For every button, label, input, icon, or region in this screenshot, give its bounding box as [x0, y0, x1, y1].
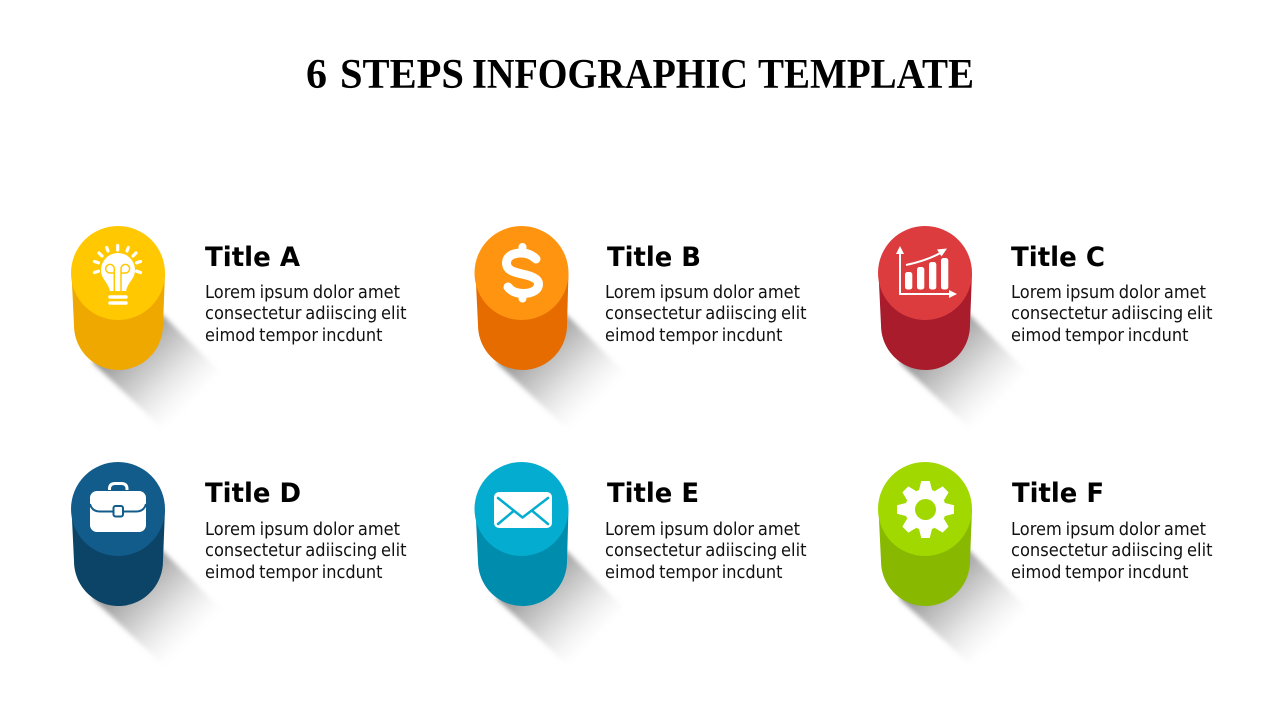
cylinder shadow D — [92, 550, 220, 666]
label C: Title C — [1011, 242, 1105, 273]
label E — [605, 478, 807, 583]
label B: Lorem ipsum dolor amet — [605, 283, 800, 303]
label F: consectetur adiiscing elit — [1011, 541, 1213, 561]
label A: eimod tempor incdunt — [205, 326, 383, 346]
cylinder shadow F — [899, 550, 1027, 666]
title: 6 — [306, 52, 327, 98]
label D: eimod tempor incdunt — [205, 563, 383, 583]
icon: bar chart — [896, 246, 957, 298]
title: STEPS — [340, 52, 464, 98]
label F: Lorem ipsum dolor amet — [1011, 520, 1206, 540]
cylinder top C — [878, 226, 972, 320]
label F: Title F — [1012, 478, 1104, 509]
label D: Title D — [205, 478, 301, 509]
label C — [1011, 242, 1213, 346]
panel: step D — [71, 462, 407, 666]
cylinder body E — [476, 509, 568, 606]
label B: Title B — [607, 242, 701, 273]
panel: step C — [878, 226, 1213, 430]
cylinder body D — [72, 509, 165, 606]
label C: eimod tempor incdunt — [1011, 326, 1189, 346]
label D: consectetur adiiscing elit — [205, 541, 407, 561]
label C: consectetur adiiscing elit — [1011, 304, 1213, 324]
icon: light bulb — [94, 246, 140, 303]
icon: briefcase — [90, 484, 146, 532]
cylinder body F — [878, 509, 972, 606]
cylinder shadow B — [496, 314, 624, 430]
cylinder top F — [878, 462, 972, 556]
cylinder body A — [72, 273, 165, 370]
panel: step E — [474, 462, 807, 666]
label E: consectetur adiiscing elit — [605, 541, 807, 561]
label E: Lorem ipsum dolor amet — [605, 520, 800, 540]
title: TEMPLATE — [758, 52, 974, 98]
label A: consectetur adiiscing elit — [205, 304, 407, 324]
cylinder body C — [878, 273, 972, 370]
label B — [605, 242, 807, 346]
label D — [205, 478, 407, 583]
panel: step A — [71, 226, 407, 430]
cylinder top E — [474, 462, 568, 556]
label F: eimod tempor incdunt — [1011, 563, 1189, 583]
icon: envelope — [494, 492, 552, 528]
panel: step F — [878, 462, 1213, 666]
label A: Lorem ipsum dolor amet — [205, 283, 400, 303]
label B: eimod tempor incdunt — [605, 326, 783, 346]
cylinder top D — [71, 462, 165, 556]
label A — [205, 242, 407, 346]
cylinder shadow E — [496, 550, 624, 666]
label D: Lorem ipsum dolor amet — [205, 520, 400, 540]
cylinder top B — [474, 226, 568, 320]
cylinder body B — [476, 273, 568, 370]
label F — [1011, 478, 1213, 583]
label E: Title E — [607, 478, 699, 509]
panel: step B — [474, 226, 807, 430]
icon: gear — [897, 481, 954, 538]
icon: dollar sign — [506, 247, 538, 298]
title: INFOGRAPHIC — [472, 52, 748, 98]
label A: Title A — [205, 242, 300, 273]
cylinder top A — [71, 226, 165, 320]
label C: Lorem ipsum dolor amet — [1011, 283, 1206, 303]
label E: eimod tempor incdunt — [605, 563, 783, 583]
cylinder shadow C — [899, 314, 1027, 430]
label B: consectetur adiiscing elit — [605, 304, 807, 324]
cylinder shadow A — [92, 314, 220, 430]
